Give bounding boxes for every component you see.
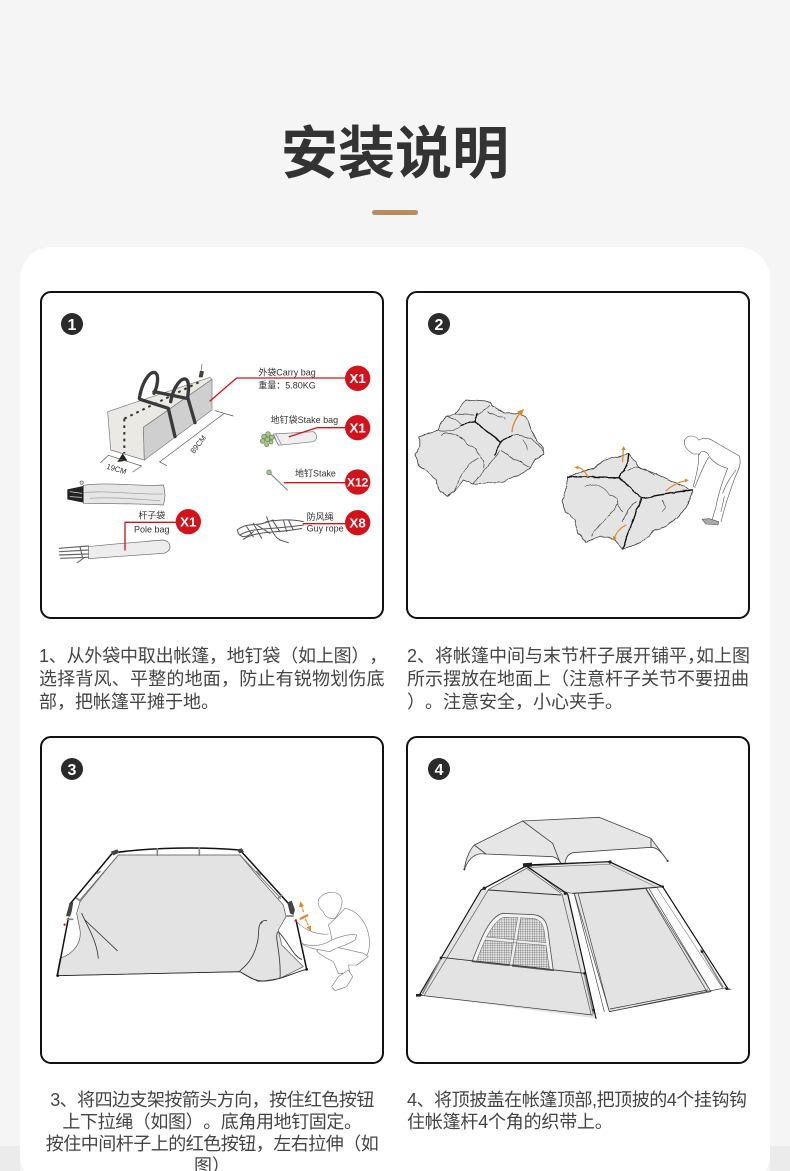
stake: 地钉Stake: [295, 468, 336, 479]
tent frame poles: [418, 862, 728, 1018]
crouching person: [297, 892, 369, 991]
tent roof: [528, 862, 663, 893]
title: 安装说明: [281, 122, 509, 186]
guy rope: Guy rope: [307, 523, 344, 533]
carry bag label: [210, 366, 370, 401]
left wall: [418, 867, 596, 1018]
illustration: package contents: [59, 364, 370, 563]
caption: step 1: [39, 646, 387, 712]
stake: [267, 468, 370, 495]
caption: step 1: 1、从外袋中取出帐篷，地钉袋（如上图），: [39, 646, 387, 666]
illustration: raising frame: [56, 848, 369, 991]
step number 3: 3: [68, 762, 77, 779]
caption: step 1: 部，把帐篷平摊于地。: [39, 692, 219, 712]
dimension 19CM: 19CM: [105, 462, 128, 476]
guy rope: X8: [350, 515, 366, 530]
stake bag: [260, 414, 370, 447]
guy rope: 防风绳: [307, 511, 334, 522]
rain fly: [463, 817, 669, 877]
carry bag label: 外袋Carry bag: [258, 366, 316, 377]
dimension 19CM: [101, 455, 142, 476]
caption: step 3: 按住中间杆子上的红色按钮，左右拉伸（如: [46, 1134, 378, 1154]
stake: X12: [347, 476, 369, 490]
caption: step 2: [407, 646, 750, 712]
caption: step 4: 4、将顶披盖在帐篷顶部,把顶披的4个挂钩钩: [407, 1090, 747, 1110]
frame joints: [56, 848, 308, 977]
step number 1: 1: [68, 317, 77, 334]
folded inner tent bag: [67, 481, 165, 505]
tent fabric: [57, 855, 303, 982]
panel: step 3 contents: [40, 736, 384, 1064]
window: [472, 913, 553, 971]
dimension 89CM: 89CM: [188, 434, 208, 455]
bottom background band left: [0, 1146, 20, 1171]
illustration: folded tent flat: [415, 400, 740, 549]
step number 3: [61, 758, 83, 780]
white content card: [20, 247, 770, 1171]
right wall: [574, 888, 711, 1012]
guy rope: [237, 510, 370, 543]
right tent bundle: [562, 453, 693, 549]
bottom background band right: [770, 1146, 790, 1171]
pole bag: 杆子袋: [138, 509, 165, 520]
step number 4: 4: [435, 762, 444, 779]
caption: step 1: 选择背风、平整的地面，防止有锐物划伤底: [39, 669, 385, 689]
left tent bundle: [415, 400, 543, 495]
step number 1: [61, 313, 83, 335]
caption: step 3: [46, 1090, 378, 1171]
panel: step 1 contents: [40, 291, 384, 619]
orange direction arrows: [299, 901, 311, 931]
caption: step 2: ）。注意安全，小心夹手。: [407, 692, 623, 712]
dimension 89CM: [159, 411, 233, 466]
pole bag: Pole bag: [134, 525, 169, 535]
panel: step 2 contents: [406, 291, 750, 619]
caption: step 2: 2、将帐篷中间与末节杆子展开铺平，如上图: [407, 646, 750, 666]
caption: step 3: 上下拉绳（如图）。底角用地钉固定。: [62, 1112, 362, 1132]
arrows: right bundle: [574, 446, 689, 541]
title accent bar: [372, 210, 418, 215]
carry bag: [108, 364, 212, 462]
carry bag label: 重量：5.80KG: [258, 380, 316, 391]
arrow: left bundle: [512, 409, 524, 432]
caption: step 3: 3、将四边支架按箭头方向，按住红色按钮: [50, 1090, 374, 1110]
step number 2: 2: [435, 317, 444, 334]
step number 2: [428, 313, 450, 335]
pole bag: [59, 509, 201, 563]
person pulling pole: [684, 436, 740, 525]
fabric folds: [82, 913, 302, 978]
carry bag label: X1: [350, 371, 366, 386]
pole bag: X1: [180, 514, 197, 529]
step number 4: [428, 758, 450, 780]
caption: step 2: 所示摆放在地面上（注意杆子关节不要扭曲: [407, 669, 749, 689]
caption: step 4: [407, 1090, 747, 1132]
frame joints: [416, 860, 732, 1011]
stake bag: 地钉袋Stake bag: [271, 414, 338, 425]
tent frame: [57, 848, 307, 981]
panel: step 4 contents: [406, 736, 750, 1064]
stake bag: X1: [350, 420, 366, 435]
caption: step 4: 住帐篷杆4个角的织带上。: [407, 1112, 613, 1132]
illustration: assembled tent with fly: [416, 817, 732, 1018]
